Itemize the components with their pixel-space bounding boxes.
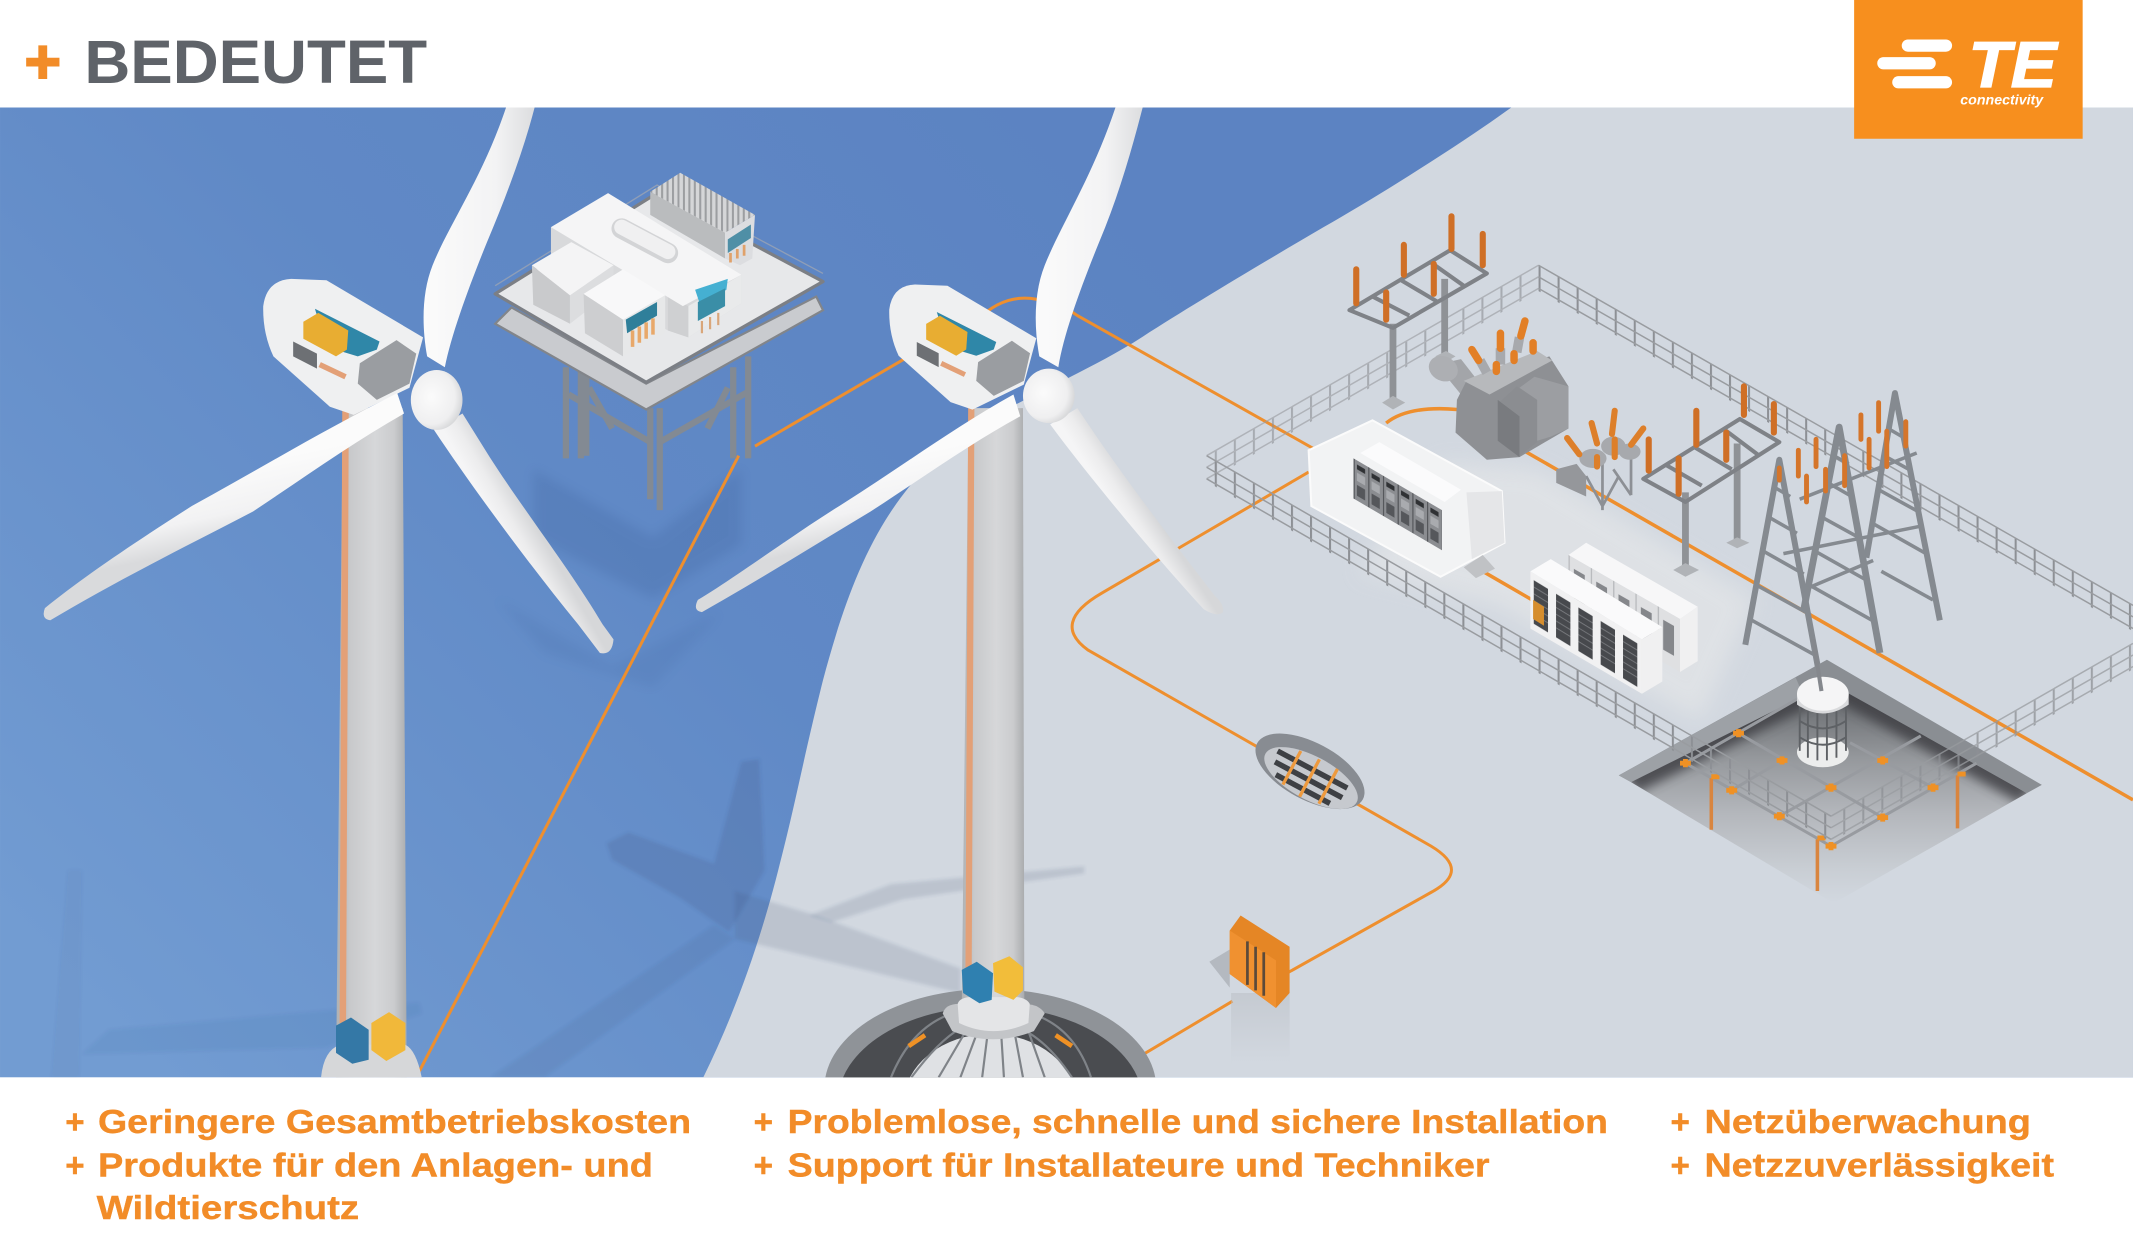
- front pylon: [1745, 460, 1823, 694]
- heading: [24, 27, 427, 97]
- gantry 2: [1643, 386, 1779, 577]
- nacelle group: [889, 284, 1036, 410]
- disconnector frame: [1586, 456, 1631, 510]
- foundation flange: [943, 1004, 1045, 1039]
- shadow: turbine 1 tower: [52, 871, 82, 1077]
- logo letters: TE: [1968, 28, 2059, 101]
- nacelle grey box: [293, 341, 317, 369]
- gantry base plates: [1382, 351, 1456, 409]
- deck railing: [495, 185, 823, 286]
- cable: turbine 1 to platform: [419, 456, 739, 1072]
- benefits column 1: Produkte für den Anlagen- und: [98, 1148, 653, 1185]
- upper deck: [495, 193, 823, 382]
- disconnector: [1556, 411, 1643, 510]
- shadow: turbine 1: [82, 1003, 422, 1054]
- box wiring: [1247, 941, 1264, 996]
- benefits column 2: +: [754, 1104, 773, 1141]
- transformer: [1425, 321, 1568, 460]
- pile head top: [1797, 677, 1849, 711]
- fence: front left: [1207, 456, 1831, 842]
- lower deck: [495, 297, 823, 409]
- land shape: [703, 107, 2133, 1077]
- logo: TE connectivity: [1854, 0, 2083, 139]
- shadow: blade right: [809, 867, 1084, 922]
- shadow: lower blade: [491, 925, 735, 1077]
- rear fence: [1207, 265, 2133, 631]
- container module: [650, 192, 725, 258]
- cable: substation to edge: [1521, 449, 2133, 800]
- yellow cabinet: [993, 956, 1023, 1000]
- heading plus: +: [24, 27, 61, 97]
- foundation pile with cage: [1797, 639, 1849, 767]
- teal unit with cabling: [695, 279, 728, 306]
- earth conductor: [1813, 639, 1821, 691]
- sea background: [0, 107, 2133, 1077]
- nacelle teal plate: [315, 309, 380, 356]
- cable: turbine 2 to container: [982, 298, 1314, 449]
- blade lower right: [1050, 408, 1223, 614]
- offshore substation platform: [495, 173, 823, 510]
- fence: back left: [1207, 265, 1539, 482]
- manhole with cable joints: [1244, 718, 1376, 825]
- module left: [532, 265, 570, 324]
- rear pylon: [1866, 393, 1940, 620]
- container floor: [1309, 420, 1505, 577]
- benefits column 2: [754, 1104, 1608, 1185]
- benefits column 2: +: [754, 1148, 773, 1185]
- middle pylon rungs: [1809, 456, 1875, 622]
- turbine 1: [44, 107, 614, 1077]
- switchgear cabinets: [1354, 458, 1442, 550]
- gantry posts: [1685, 443, 1737, 570]
- cable: transformer feed: [1386, 409, 1457, 423]
- gearbox: [976, 341, 1030, 396]
- pile base: [1797, 737, 1849, 767]
- benefits column 2: Support für Installateure und Techniker: [788, 1148, 1490, 1185]
- blue cabinet: [962, 962, 993, 1003]
- platform legs: [566, 356, 748, 510]
- orange cables: [419, 298, 2133, 1077]
- fence: front right: [1831, 643, 2133, 842]
- container with switchgear: [1309, 420, 1505, 578]
- nacelle cable: [941, 363, 965, 375]
- radiators: [1498, 400, 1519, 457]
- box body: [1230, 915, 1290, 1008]
- orange label panel: [1533, 600, 1544, 626]
- nacelle: [889, 284, 1036, 410]
- shadow: tower 2: [735, 891, 960, 993]
- steps: [1464, 555, 1495, 578]
- nacelle grey box: [917, 342, 939, 367]
- transformer top: [1464, 351, 1552, 394]
- foundation interior: [838, 1007, 1143, 1197]
- tower cable: [969, 381, 974, 971]
- pile head side: [1797, 694, 1849, 713]
- grid nodes: [1680, 729, 1966, 850]
- rear pylon legs: [1866, 393, 1940, 620]
- front cabinets: [1530, 559, 1662, 639]
- main building roof: [551, 193, 741, 306]
- container outline: [1309, 420, 1505, 577]
- transmission pylons: [1745, 393, 1940, 694]
- container right wall: [1466, 491, 1505, 559]
- substation light floor: [1376, 468, 1745, 709]
- benefits column 3: Netzzuverlässigkeit: [1704, 1148, 2054, 1185]
- junction box: [1209, 915, 1290, 1064]
- collar: [958, 997, 1030, 1031]
- cable: container to cabinets: [1484, 572, 1530, 601]
- bushings: [1480, 337, 1519, 373]
- benefits column 3: +: [1670, 1148, 1690, 1185]
- pit floor: [1631, 683, 2027, 903]
- benefits column 1: [65, 1104, 691, 1227]
- gantry base plates: [1673, 537, 1749, 577]
- benefits column 1: Geringere Gesamtbetriebskosten: [98, 1104, 691, 1141]
- blade left: [44, 393, 404, 620]
- middle pylon: [1804, 427, 1880, 653]
- blade up: [1036, 107, 1143, 367]
- benefits column 1: +: [65, 1104, 85, 1141]
- disconnector box: [1556, 464, 1586, 497]
- pylon cross braces: [1783, 453, 1919, 590]
- disconnector bushings: [1567, 411, 1643, 467]
- gantry 1: [1349, 216, 1487, 409]
- pit outer rim: [1619, 660, 2042, 793]
- foundation cage: [891, 1013, 1091, 1175]
- nacelle cable: [320, 365, 346, 377]
- gantry posts: [1393, 279, 1445, 403]
- benefits column 1: Wildtierschutz: [97, 1190, 359, 1227]
- gantry frame: [1349, 250, 1487, 328]
- roof tank: [622, 229, 668, 253]
- platform reflection on water: [538, 480, 737, 592]
- foundation rim: [824, 989, 1156, 1188]
- gantry frame: [1643, 419, 1779, 502]
- front pylon rungs: [1749, 487, 1816, 656]
- benefits column 3: +: [1670, 1104, 1690, 1141]
- tower cable: [343, 377, 348, 1023]
- blue cabinet: [336, 1018, 369, 1064]
- shadow: nacelle and upper blade: [607, 759, 765, 932]
- disconnector rings: [1579, 449, 1607, 468]
- pylon insulators: [1779, 403, 1906, 502]
- main building walls: [551, 227, 741, 337]
- gearbox: [358, 340, 416, 400]
- benefits column 1: +: [65, 1148, 85, 1185]
- blade lower right: [434, 414, 614, 653]
- nacelle yellow unit: [926, 316, 967, 356]
- rear pylon rungs: [1873, 429, 1933, 600]
- turbine 2: [696, 107, 1223, 1197]
- gantry insulators: [1356, 216, 1483, 320]
- tower: [336, 408, 407, 1077]
- blade left: [696, 394, 1020, 612]
- transformer cylinder tank: [1450, 359, 1474, 394]
- fence: back right: [1539, 265, 2133, 631]
- switchgear tops: [1360, 442, 1461, 502]
- nacelle teal plate: [937, 312, 996, 356]
- cabinet rows: [1530, 543, 1698, 694]
- transformer body: [1456, 356, 1568, 460]
- front pylon legs: [1745, 460, 1823, 694]
- middle pylon legs: [1804, 427, 1880, 653]
- box shadow: [1209, 950, 1230, 988]
- front fence: [1207, 456, 2133, 842]
- logo stripes: [1877, 39, 1952, 88]
- turbine shadows on ground: [499, 760, 1086, 1076]
- base: [321, 1045, 422, 1077]
- excavation pit with ground grid: [1619, 639, 2042, 903]
- blade up: [424, 107, 535, 367]
- tower: [962, 408, 1024, 1007]
- nacelle: [263, 279, 423, 415]
- back cabinets: [1568, 543, 1698, 619]
- cable: platform to turbine 2: [755, 356, 909, 446]
- benefits column 2: Problemlose, schnelle und sichere Installation: [788, 1104, 1608, 1141]
- pile rebar cage: [1800, 705, 1846, 760]
- hub: [411, 370, 463, 430]
- box reflection: [1231, 993, 1290, 1064]
- hub: [1023, 369, 1075, 423]
- scene panel: offshore to onshore wind grid: [0, 108, 2133, 1078]
- yellow cabinet: [371, 1012, 405, 1061]
- cable: container via manhole to junction box: [1072, 472, 1451, 1077]
- benefits column 3: Netzüberwachung: [1704, 1104, 2031, 1141]
- heading text: BEDEUTET: [84, 28, 427, 96]
- logo wordmark: connectivity: [1960, 93, 2044, 109]
- benefits column 3: [1670, 1104, 2054, 1185]
- pit wall shading: [1631, 683, 2027, 793]
- grid rods: [1685, 699, 1977, 846]
- nacelle yellow unit: [303, 313, 348, 356]
- module front: [584, 294, 623, 356]
- rim left lighter side: [1619, 677, 1804, 782]
- gantry insulators: [1649, 386, 1774, 494]
- module front panel: [626, 302, 657, 333]
- ground spikes: [1711, 775, 1958, 891]
